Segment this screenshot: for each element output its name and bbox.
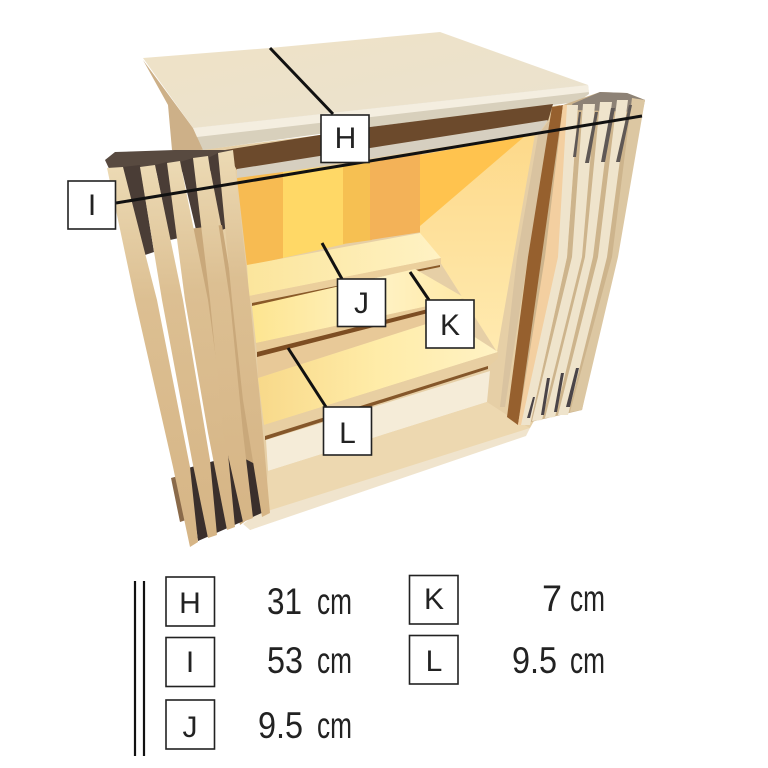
cabinet side under top [143, 60, 206, 160]
legend L: 9.5 [512, 640, 557, 681]
legend L: cm [570, 640, 605, 681]
slat 3 [167, 161, 235, 530]
dark top rail [105, 150, 233, 175]
legend L: L [426, 645, 442, 678]
legend J: 9.5 [258, 705, 303, 746]
dark underside of top [225, 104, 553, 170]
legend J [166, 700, 352, 749]
slat backing [518, 92, 645, 425]
label K: K [440, 309, 460, 342]
legend I [166, 638, 352, 686]
interior back wall [237, 172, 283, 266]
slat 2 [532, 104, 595, 421]
label I: I [88, 189, 96, 222]
legend K: cm [570, 578, 605, 619]
shelf J [247, 233, 441, 296]
legend I: 53 [267, 640, 303, 681]
slat 3 [545, 102, 612, 418]
legend J: cm [317, 705, 352, 746]
tan backing [180, 225, 268, 525]
legend H: H [179, 587, 201, 620]
top board [143, 32, 588, 128]
base drawer [266, 371, 490, 471]
slat 1 peach face [518, 105, 578, 425]
shelf L [257, 311, 445, 378]
slat 4 [558, 100, 628, 415]
dark top strips [573, 112, 581, 157]
inner frame [500, 122, 552, 407]
legend H: 31 [267, 581, 302, 622]
legend H [166, 577, 352, 626]
legend K [410, 576, 605, 624]
legend double rule [135, 581, 144, 756]
hinge [171, 476, 186, 522]
dark bottom block [188, 452, 264, 541]
legend J: J [182, 711, 198, 744]
label H: H [335, 122, 356, 155]
label J: J [354, 287, 369, 320]
label K [426, 300, 474, 348]
cabinet rear body [200, 105, 560, 530]
brown jamb [507, 105, 563, 425]
slat 5 [570, 98, 645, 412]
slat 1 [107, 167, 198, 547]
legend K: 7 [542, 578, 562, 619]
cabinet [105, 32, 645, 547]
legend I: I [186, 646, 194, 679]
slat 1 light edge [521, 105, 578, 425]
legend I: cm [317, 640, 352, 681]
label H [321, 115, 369, 162]
shelf K [252, 269, 465, 343]
slat 2 [140, 165, 217, 538]
slat 4 [193, 156, 253, 522]
top board front edge [193, 85, 589, 150]
label L [324, 407, 372, 455]
base floor [255, 402, 530, 520]
label L: L [339, 417, 356, 450]
label J [338, 279, 386, 326]
legend L [410, 636, 605, 684]
dark top rail [572, 92, 645, 112]
label I [68, 181, 116, 229]
legend K: K [424, 583, 444, 616]
legend H: cm [317, 581, 352, 622]
slat 5 [218, 150, 270, 517]
dark strips [123, 165, 154, 256]
right door [500, 92, 645, 425]
dimension lines [116, 48, 642, 407]
pale trim under top [237, 120, 548, 179]
interior right wall [420, 134, 535, 352]
dark bottom strips [527, 397, 535, 418]
left door [105, 150, 270, 547]
